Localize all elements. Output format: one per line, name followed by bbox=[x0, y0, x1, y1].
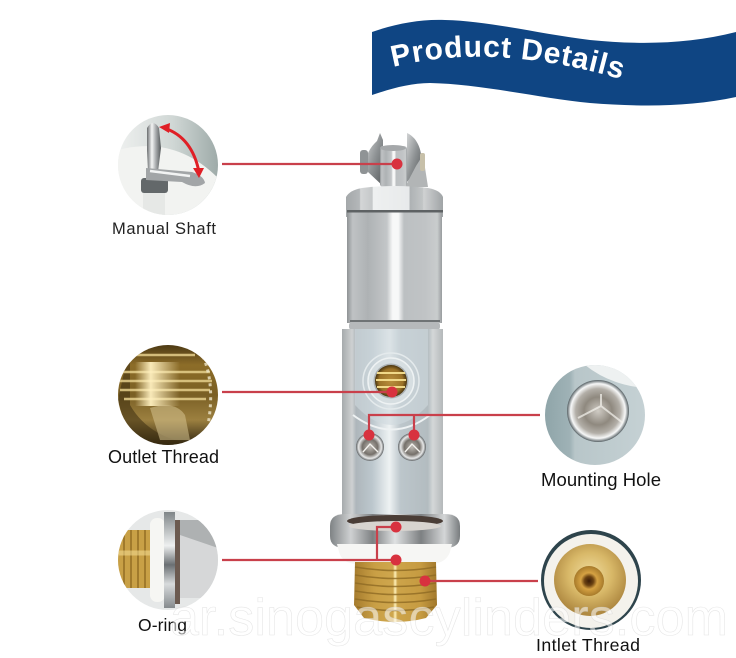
valve body block bbox=[342, 329, 443, 519]
line: mounting hole bbox=[369, 415, 540, 435]
valve top: manual shaft head bbox=[360, 133, 428, 187]
line: inlet thread bbox=[425, 580, 538, 582]
label: Manual Shaft: Manual Shaft bbox=[112, 220, 216, 238]
outlet port bbox=[363, 353, 419, 409]
mounting holes bbox=[356, 433, 426, 461]
label: O-ring: O-ring bbox=[138, 615, 187, 635]
valve flange bbox=[330, 514, 460, 548]
banner: Product Details bbox=[372, 20, 736, 106]
detail circle: o-ring bbox=[118, 510, 218, 610]
valve brass inlet thread bbox=[354, 562, 437, 622]
valve cylinder bbox=[347, 212, 442, 323]
detail circle: mounting hole bbox=[545, 365, 645, 465]
label: Outlet Thread: Outlet Thread bbox=[108, 447, 219, 467]
product: valve bbox=[330, 133, 460, 622]
line: outlet thread bbox=[222, 391, 392, 393]
valve hex nut bbox=[346, 186, 443, 217]
marker dots bbox=[364, 158, 430, 586]
leader lines bbox=[222, 164, 540, 581]
detail circle: inlet thread bbox=[541, 530, 641, 630]
icon: red rotation arrow bbox=[159, 123, 204, 178]
banner title: Product Details bbox=[390, 35, 623, 78]
label: Mounting Hole: Mounting Hole bbox=[541, 469, 661, 490]
line: manual shaft bbox=[222, 163, 397, 165]
watermark: ar.sinogascylinders.com bbox=[170, 589, 728, 647]
detail circle: manual shaft bbox=[118, 115, 218, 215]
line: o-ring bbox=[222, 527, 396, 560]
label: Intlet Thread: Intlet Thread bbox=[536, 635, 640, 655]
valve white O-ring bbox=[337, 544, 452, 564]
detail circle: outlet thread bbox=[118, 345, 218, 445]
